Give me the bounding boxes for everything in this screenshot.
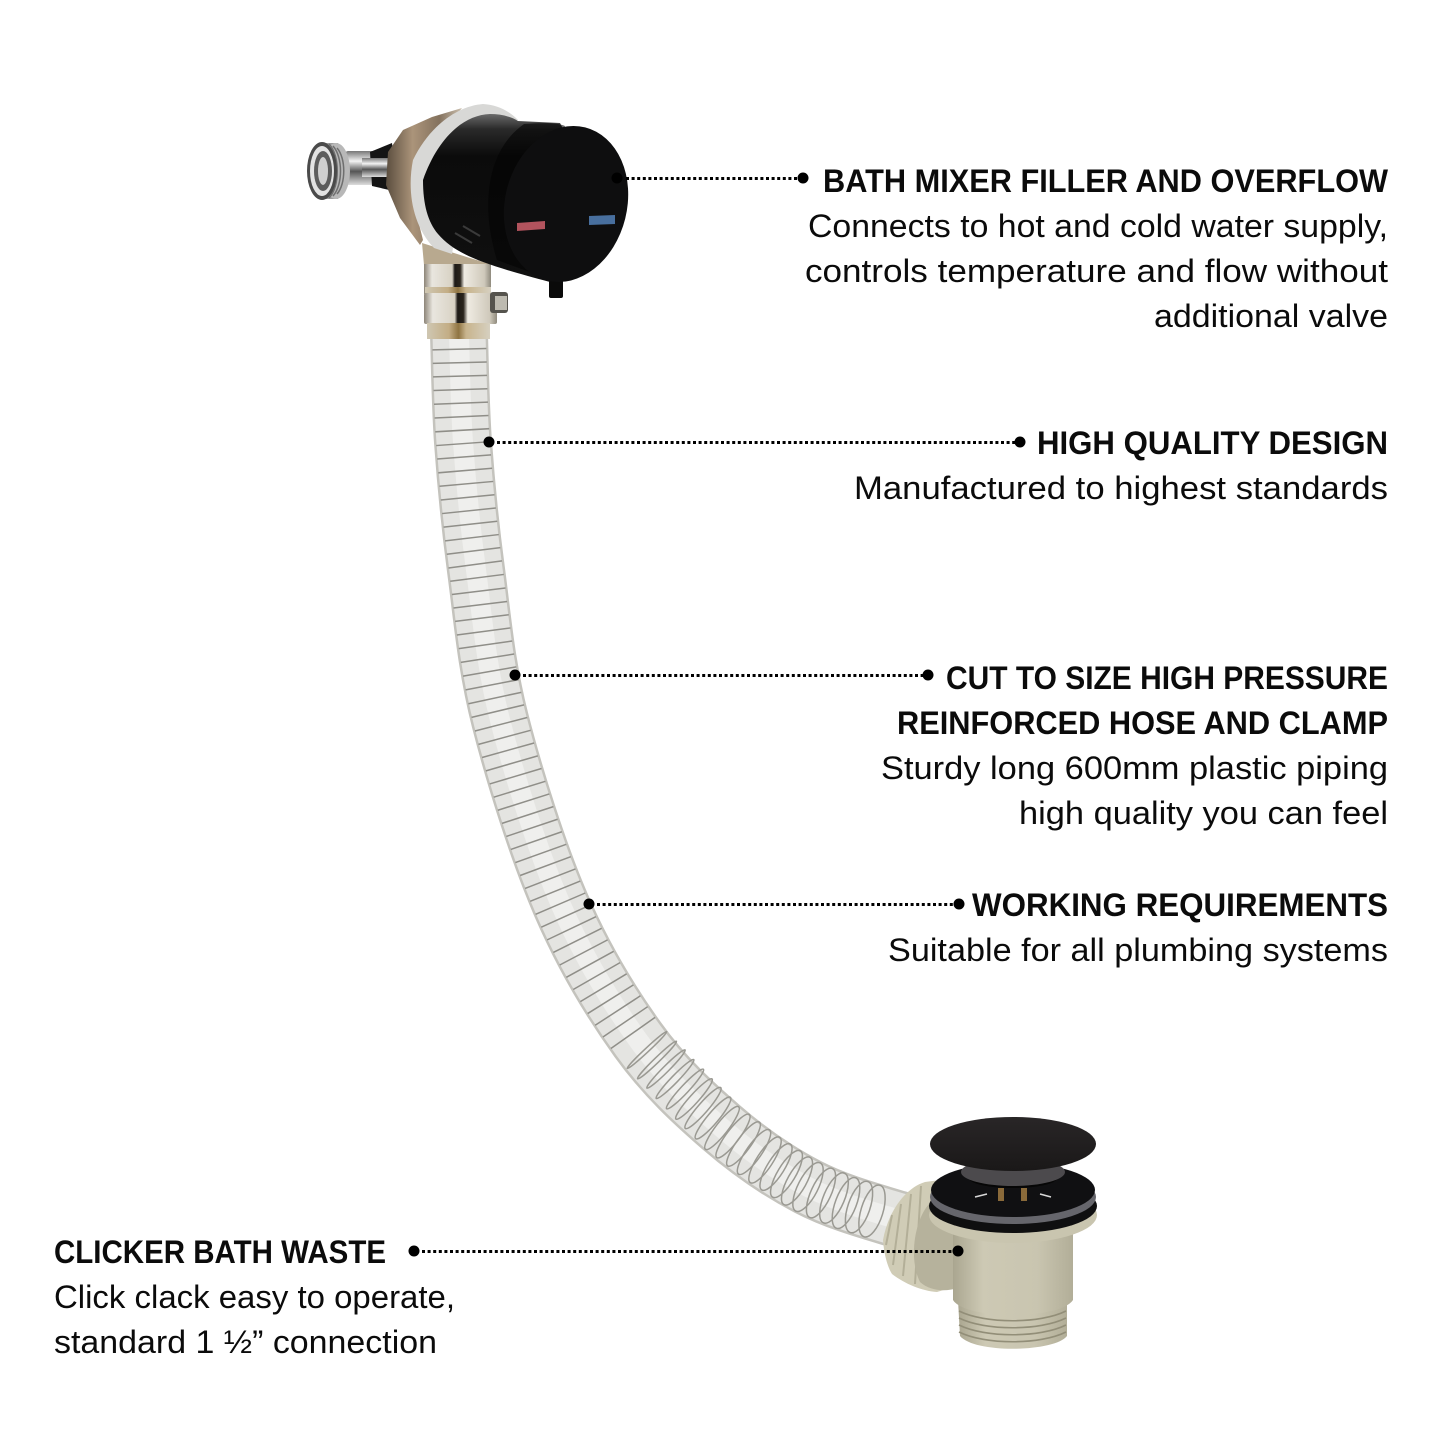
text block: [854, 425, 1388, 506]
text block: controls temperature and flow without: [805, 253, 1388, 289]
cap: [930, 1117, 1096, 1171]
text block: CLICKER BATH WASTE: [54, 1234, 386, 1270]
white ring: [411, 104, 518, 254]
text block: CUT TO SIZE HIGH PRESSURE: [946, 660, 1388, 696]
text block: additional valve: [1154, 298, 1388, 334]
control face: [488, 113, 644, 295]
text block: [54, 1234, 455, 1360]
brass collar: [386, 108, 462, 245]
leader line: [408, 1246, 964, 1256]
text block: [888, 887, 1388, 968]
leader line: [612, 172, 808, 184]
leader line: [510, 670, 934, 680]
leader line: [584, 898, 964, 910]
hose: [459, 335, 900, 1240]
text block: [881, 660, 1388, 831]
hose nut: [883, 1180, 950, 1292]
elbow and clamp: [422, 243, 508, 339]
text block: WORKING REQUIREMENTS: [972, 887, 1388, 923]
callout: clicker bath waste: [54, 1234, 964, 1360]
black body: [423, 114, 600, 282]
text block: REINFORCED HOSE AND CLAMP: [897, 705, 1388, 741]
flange: [929, 1163, 1097, 1233]
leader line: [484, 436, 1026, 448]
elbow: [914, 1203, 958, 1290]
text block: Click clack easy to operate,: [54, 1279, 455, 1315]
bath mixer filler and overflow unit: [307, 104, 644, 339]
hose coils near the waste: [626, 1030, 890, 1240]
text block: HIGH QUALITY DESIGN: [1037, 425, 1388, 461]
text block: Sturdy long 600mm plastic piping: [881, 750, 1388, 786]
text block: Suitable for all plumbing systems: [888, 932, 1388, 968]
callout: high quality design: [484, 425, 1388, 506]
callout: working requirements: [584, 887, 1388, 968]
thread: [958, 1300, 1067, 1349]
main cup: [953, 1228, 1073, 1315]
callout: bath mixer filler and overflow: [612, 163, 1389, 334]
text block: [805, 163, 1389, 334]
icon: cold mark: [589, 215, 615, 225]
text block: standard 1 ½” connection: [54, 1324, 437, 1360]
icon: drain knob: [549, 280, 563, 298]
icon: hot mark: [517, 221, 545, 231]
callout: cut to size hose: [510, 660, 1388, 831]
text block: Manufactured to highest standards: [854, 470, 1388, 506]
beige rim: [929, 1187, 1097, 1243]
text block: Connects to hot and cold water supply,: [808, 208, 1388, 244]
icon: inlet connector: [307, 142, 398, 200]
text block: BATH MIXER FILLER AND OVERFLOW: [823, 163, 1389, 199]
stem: [961, 1158, 1065, 1188]
clicker bath waste: [883, 1117, 1097, 1349]
text block: high quality you can feel: [1019, 795, 1388, 831]
